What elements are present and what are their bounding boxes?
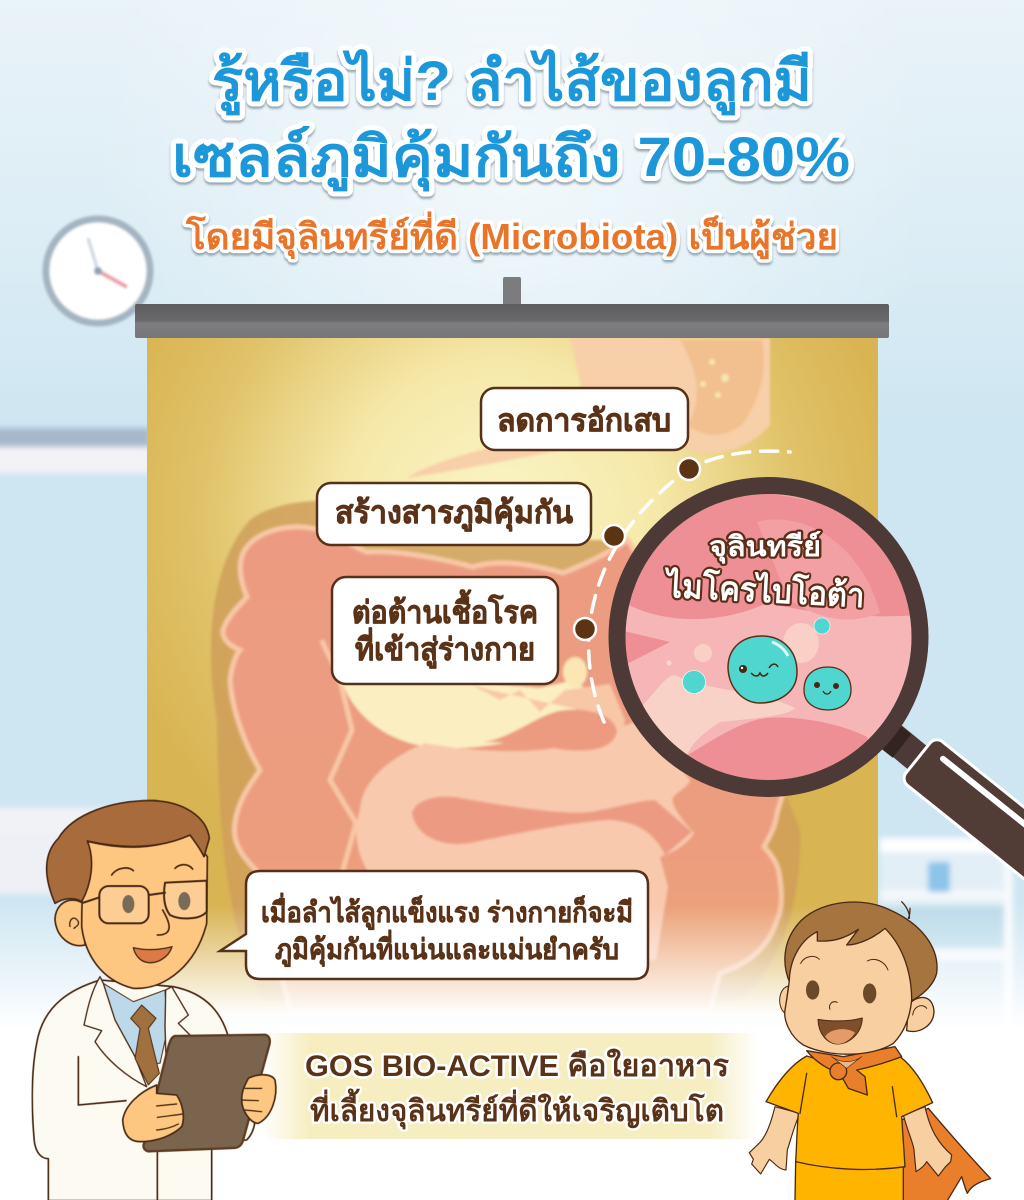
callout: reduce inflammation xyxy=(481,388,700,480)
microbe: small xyxy=(804,667,851,710)
right hand xyxy=(242,1075,276,1123)
panel: projection screen with intestine xyxy=(135,277,889,1016)
left hand xyxy=(123,1085,183,1142)
speech bubble: doctor: เมื่อลำไส้ลูกแข็งแรง ร่างกายก็จะมี xyxy=(261,892,633,930)
subtitle: โดยมีจุลินทรีย์ที่ดี (Microbiota) เป็นผู้ช่วย xyxy=(185,211,838,260)
glasses xyxy=(83,881,207,923)
hair xyxy=(47,801,209,903)
dashed connector arc xyxy=(589,451,790,722)
lens scene xyxy=(626,494,912,780)
microbe: big xyxy=(728,636,797,703)
banner: GOS BIO-ACTIVE xyxy=(262,1033,758,1139)
lens ring xyxy=(617,486,920,788)
banner: GOS BIO-ACTIVE: ที่เลี้ยงจุลินทรีย์ที่ดีให้เจริญเติบโต xyxy=(310,1088,724,1130)
callout: fight pathogens: ต่อต้านเชื้อโรค xyxy=(352,589,538,630)
banner: GOS BIO-ACTIVE: GOS BIO-ACTIVE คือใยอาหาร xyxy=(305,1048,729,1083)
screen surface xyxy=(147,336,878,1016)
illustration: digestive system xyxy=(211,338,800,1010)
illustration: doctor xyxy=(32,801,276,1200)
lens label: ไมโครไบโอต้า xyxy=(663,566,865,614)
right ear xyxy=(907,997,934,1031)
tablet xyxy=(144,1035,270,1151)
callout: fight pathogens: ที่เข้าสู่ร่างกาย xyxy=(355,627,535,669)
shirt xyxy=(766,1056,933,1200)
callout: build immunity xyxy=(317,483,625,547)
face xyxy=(82,835,207,988)
face xyxy=(785,928,912,1054)
shirt xyxy=(103,983,167,1063)
title xyxy=(172,48,850,192)
illustration: child with cape xyxy=(749,902,991,1200)
mouth xyxy=(818,1018,862,1044)
icon: wall clock xyxy=(46,219,150,323)
callout: reduce inflammation: ลดการอักเสบ xyxy=(497,403,671,438)
title: เซลล์ภูมิคุ้มกันถึง 70-80% xyxy=(172,125,850,192)
roller bar xyxy=(135,277,889,338)
tie xyxy=(131,1005,159,1085)
handle xyxy=(885,731,1024,899)
arms xyxy=(749,1107,800,1174)
microbe: dots xyxy=(682,618,830,694)
eyes xyxy=(806,980,876,1003)
icon: magnifying glass xyxy=(617,486,1024,899)
lens label: จุลินทรีย์ xyxy=(709,531,821,564)
scarf xyxy=(807,1047,902,1095)
title: รู้หรือไม่? ลำไส้ของลูกมี xyxy=(212,48,812,116)
callout: fight pathogens xyxy=(332,577,596,684)
callout: build immunity: สร้างสารภูมิคุ้มกัน xyxy=(335,495,573,532)
lens label xyxy=(663,531,865,614)
coat xyxy=(32,980,255,1200)
eyes xyxy=(122,892,190,913)
ear xyxy=(55,900,85,946)
speech bubble: doctor xyxy=(220,871,648,979)
mouth xyxy=(133,947,172,963)
hair back xyxy=(785,902,937,1002)
cape xyxy=(902,1108,991,1200)
speech bubble: doctor: ภูมิคุ้มกันที่แน่นและแม่นยำครับ xyxy=(275,929,619,967)
left ear xyxy=(780,986,788,1013)
lapels xyxy=(84,977,147,1087)
